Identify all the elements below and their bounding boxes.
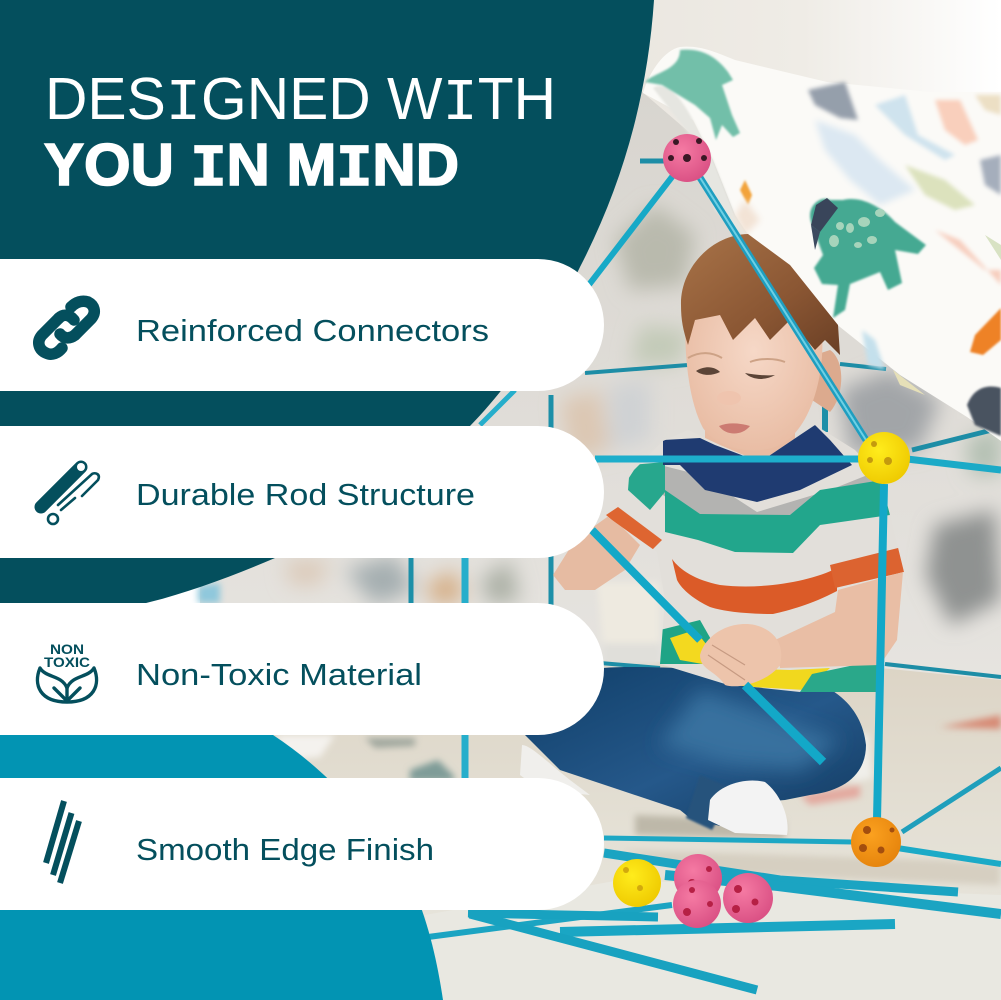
icon: non toxic leaf: TOXIC: [44, 655, 90, 670]
head group: [681, 234, 841, 450]
bottom colours: [660, 620, 710, 664]
icon: three slanted rods: [46, 801, 79, 883]
nose: [717, 391, 741, 405]
shirt base: [608, 430, 858, 692]
green band: [628, 462, 665, 510]
label: Reinforced Connectors: [136, 313, 489, 348]
navy collar: [663, 425, 852, 502]
title: [44, 66, 556, 203]
mouth: [719, 423, 750, 434]
wall: [560, 0, 1001, 300]
dino prints: [645, 50, 1001, 436]
yellow ball: [858, 432, 910, 484]
right arm: [775, 572, 903, 668]
floor: [200, 660, 1001, 1000]
icon: non toxic leaf: NON: [50, 642, 84, 657]
shirt: [600, 420, 910, 700]
title line 1: DESIGNED WITH: [45, 66, 556, 137]
title line 2: YOU IN MIND: [44, 132, 459, 203]
socks: [708, 781, 788, 835]
icon: non toxic leaf: [37, 642, 97, 702]
hand: [700, 624, 781, 686]
boy: [520, 234, 910, 835]
rug marks: [198, 582, 1001, 885]
icon: chain link: [39, 301, 94, 354]
jean cuff: [686, 775, 735, 830]
pill 4 background: [0, 778, 604, 910]
rods: front structure: [428, 173, 1001, 990]
orange ball: [851, 817, 901, 867]
pink ball top: [663, 134, 711, 182]
light teal bottom shape: [0, 735, 443, 1000]
orange band: [672, 559, 837, 614]
rug lower area: [425, 880, 1001, 1000]
pink balls floor: [673, 854, 773, 928]
panel: smooth edge finish: [0, 778, 604, 910]
label: Smooth Edge Finish: [136, 832, 434, 867]
blanket: [643, 47, 1001, 441]
panel: durable rod structure: [0, 426, 604, 558]
tent interior: [200, 90, 1001, 760]
dark teal header shape: [0, 0, 654, 640]
pill 2 background: [0, 426, 604, 558]
pill 1 background: [0, 259, 604, 391]
eyes: [696, 367, 720, 375]
label: Non-Toxic Material: [136, 657, 422, 692]
panel: reinforced connectors: [0, 259, 604, 391]
gray band: [663, 466, 873, 515]
jeans: [525, 667, 866, 826]
icon: two rods: [41, 463, 99, 524]
neck: [705, 425, 795, 475]
pill 3 background: [0, 603, 604, 735]
yellow ball floor: [613, 859, 661, 907]
label: Durable Rod Structure: [136, 477, 475, 512]
connector balls: [613, 134, 910, 928]
tent fabric patterns: [285, 205, 1001, 625]
panel: non-toxic material: [0, 603, 604, 735]
left arm: [553, 515, 640, 590]
sleeve stripes: [606, 507, 662, 552]
back rods: [411, 161, 1001, 780]
